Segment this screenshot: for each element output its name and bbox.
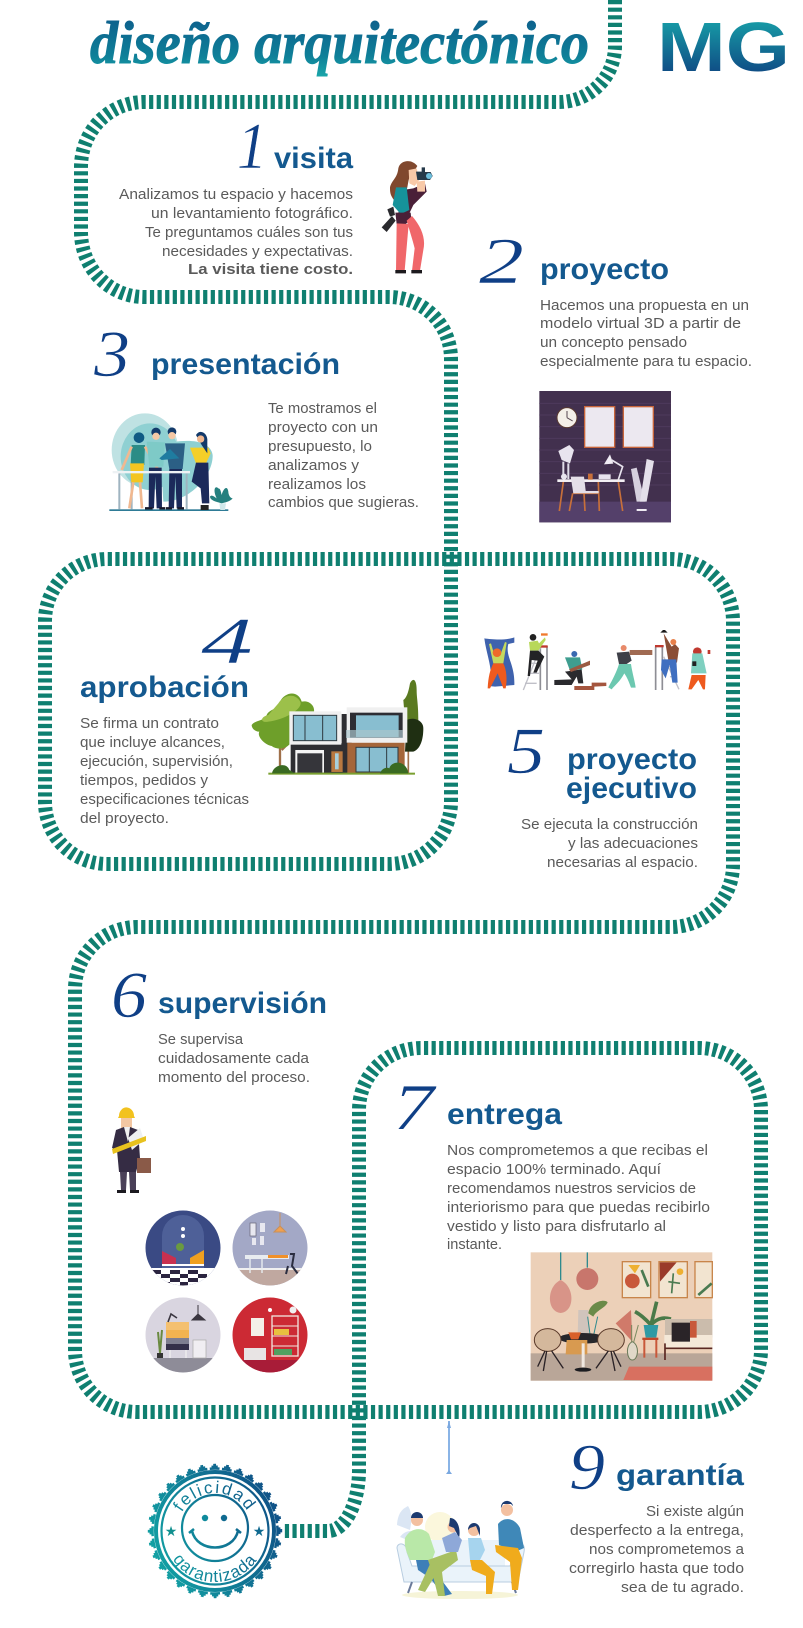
- body text: cuidadosamente cada: [158, 1050, 310, 1067]
- body text: [521, 816, 698, 871]
- illustration: friends on a sofa: [397, 1501, 524, 1599]
- circle: lilac desk: [232, 1210, 308, 1286]
- heading proyecto ejecutivo: proyecto: [567, 743, 697, 776]
- body text: ejecución, supervisión,: [80, 753, 233, 770]
- body text: [268, 400, 419, 511]
- body text: y las adecuaciones: [568, 835, 698, 852]
- illustration: studio room: [539, 391, 671, 522]
- body text: vestido y listo para disfrutarlo al: [447, 1218, 666, 1235]
- body text: desperfecto a la entrega,: [570, 1522, 744, 1539]
- thin blue connector: [446, 1421, 452, 1474]
- illustration: team at table: [109, 413, 233, 511]
- body text: realizamos los: [268, 476, 366, 493]
- body text: Nos comprometemos a que recibas el: [447, 1142, 708, 1159]
- body text: cambios que sugieras.: [268, 494, 419, 511]
- number 1: 1: [237, 110, 267, 183]
- body text: Se ejecuta la construcción: [521, 816, 698, 833]
- body text: modelo virtual 3D a partir de: [540, 315, 741, 332]
- body text: Hacemos una propuesta en un: [540, 297, 749, 314]
- body text: nos comprometemos a: [589, 1541, 745, 1558]
- body text: sea de tu agrado.: [621, 1579, 744, 1596]
- panel: step 5 proyecto ejecutivo: [484, 630, 710, 871]
- icon: photographer: [382, 161, 433, 273]
- stamp text bottom: garantizada: [172, 1556, 257, 1582]
- heading aprobación: aprobación: [80, 671, 249, 704]
- body text: proyecto con un: [268, 419, 378, 436]
- number 6: 6: [111, 959, 147, 1032]
- body text: necesidades y expectativas.: [162, 243, 353, 260]
- stamp stars: ★: [165, 1524, 177, 1540]
- body text: necesarias al espacio.: [547, 854, 698, 871]
- body text: Te preguntamos cuáles son tus: [145, 224, 353, 241]
- heading supervisión: supervisión: [158, 987, 327, 1020]
- panel: step 4 aprobación: [80, 605, 423, 827]
- number 9: 9: [569, 1431, 605, 1504]
- body text: momento del proceso.: [158, 1069, 310, 1086]
- stamp text top: felicidad: [173, 1480, 256, 1512]
- body text: instante.: [447, 1236, 502, 1253]
- logo: MG: [657, 8, 790, 86]
- body text: [569, 1503, 745, 1596]
- body text: tiempos, pedidos y: [80, 772, 209, 789]
- heading entrega: entrega: [447, 1098, 562, 1131]
- illustration: modern house: [252, 680, 423, 775]
- body text: Se firma un contrato: [80, 715, 219, 732]
- body text: Te mostramos el: [268, 400, 377, 417]
- body text: [447, 1142, 710, 1253]
- panel: step 6 supervisión: [111, 959, 327, 1373]
- body text: Si existe algún: [646, 1503, 744, 1520]
- number 7: 7: [393, 1071, 438, 1144]
- body text: que incluye alcances,: [80, 734, 225, 751]
- heading proyecto ejecutivo: [566, 743, 697, 805]
- body text: [119, 186, 353, 278]
- body text: analizamos y: [268, 457, 360, 474]
- panel: step 9 garantía: [397, 1431, 745, 1599]
- illustration: furnished interior: [531, 1252, 712, 1381]
- heading visita: visita: [274, 142, 353, 175]
- body text: [158, 1031, 310, 1086]
- body text: un levantamiento fotográfico.: [151, 205, 353, 222]
- body text: Analizamos tu espacio y hacemos: [119, 186, 353, 203]
- panel: step 3 presentación: [93, 318, 419, 511]
- body text: especialmente para tu espacio.: [540, 353, 752, 370]
- circle: grey dresser: [145, 1297, 221, 1373]
- body text: corregirlo hasta que todo: [569, 1560, 744, 1577]
- number 2: 2: [479, 225, 524, 298]
- stamp: felicidad garantizada: [148, 1464, 282, 1598]
- panel: step 2 proyecto: [479, 225, 752, 522]
- illustration: construction workers: [484, 630, 710, 690]
- heading garantía: garantía: [616, 1459, 744, 1492]
- body text: recomendamos nuestros servicios de: [447, 1180, 696, 1197]
- heading presentación: presentación: [151, 348, 340, 381]
- stamp: felicidad garantizada: ★: [253, 1524, 265, 1540]
- body text: [540, 297, 752, 370]
- icon: supervisor with helmet: [112, 1107, 151, 1193]
- number 5: 5: [507, 715, 545, 788]
- body text: La visita tiene costo.: [188, 261, 353, 278]
- circle: navy lounge: [145, 1210, 221, 1286]
- body text: presupuesto, lo: [268, 438, 372, 455]
- illustration: four interior circles: [145, 1210, 308, 1373]
- body text: del proyecto.: [80, 810, 169, 827]
- heading proyecto ejecutivo: ejecutivo: [566, 772, 697, 805]
- heading proyecto: proyecto: [540, 253, 669, 286]
- body text: interiorismo para que puedas recibirlo: [447, 1199, 710, 1216]
- title: diseño arquitectónico: [90, 10, 589, 76]
- number 3: 3: [93, 318, 130, 391]
- body text: espacio 100% terminado. Aquí: [447, 1161, 662, 1178]
- panel: step 1 visita: [119, 110, 433, 278]
- circle: red bookshelf: [232, 1297, 308, 1373]
- panel: step 7 entrega: [393, 1071, 712, 1474]
- body text: especificaciones técnicas: [80, 791, 249, 808]
- smiley face: [189, 1515, 241, 1548]
- body text: Se supervisa: [158, 1031, 244, 1048]
- body text: [80, 715, 249, 827]
- number 4: 4: [201, 605, 253, 678]
- body text: un concepto pensado: [540, 334, 687, 351]
